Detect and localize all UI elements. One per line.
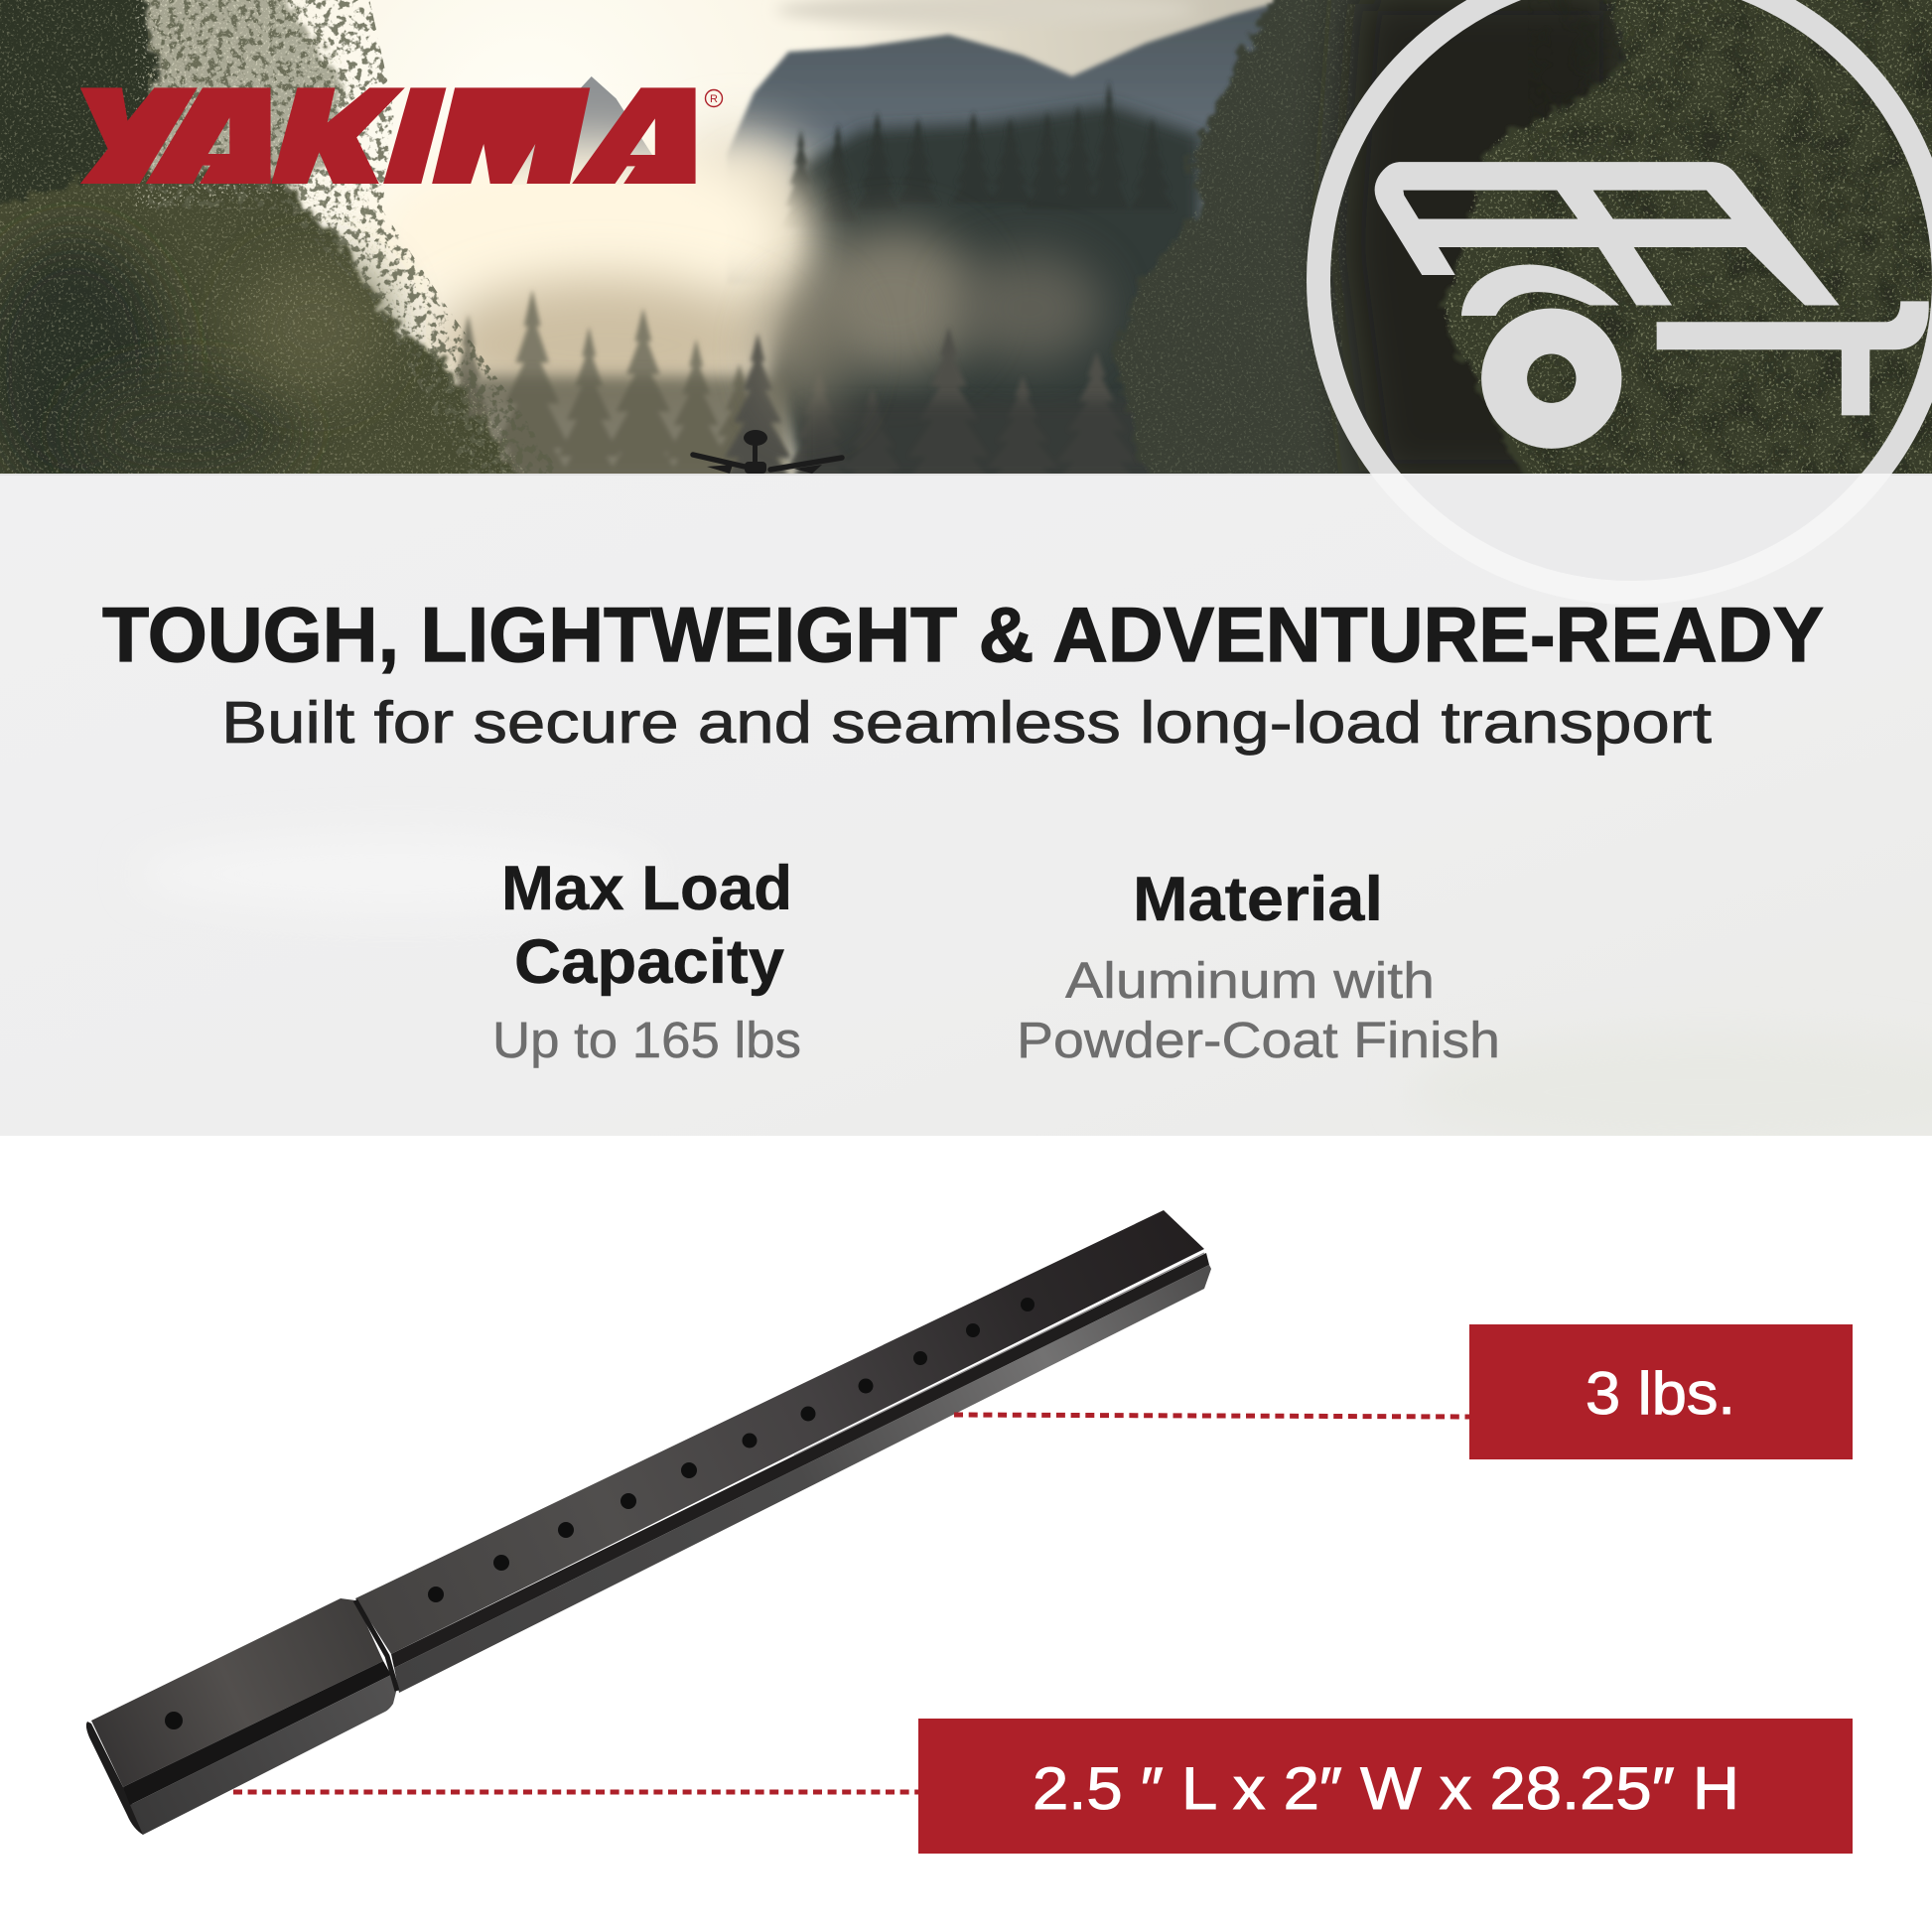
scattered leaves at tree line xyxy=(148,0,561,475)
spec: material: Material xyxy=(1133,865,1383,934)
dotted leader: dimensions xyxy=(233,1789,918,1795)
subtitle: Built for secure and seamless long-load transport xyxy=(221,690,1712,756)
spec: max load capacity: Capacity xyxy=(514,927,784,997)
callout: weight xyxy=(1469,1324,1853,1459)
callout: weight: 3 lbs. xyxy=(1586,1360,1735,1427)
spec: material: Aluminum with xyxy=(1065,952,1435,1009)
tube holes xyxy=(165,1298,1035,1729)
spec: max load capacity xyxy=(492,854,801,1068)
spec: material xyxy=(1017,865,1500,1068)
right forest xyxy=(1118,0,1626,474)
icon: bike handlebar silhouette xyxy=(693,430,842,474)
callout: dimensions xyxy=(918,1719,1853,1854)
upper leafy canopy xyxy=(142,0,345,191)
icon: trailer in a ring xyxy=(1307,0,1932,476)
panel: translucent spec panel xyxy=(0,474,1932,1152)
spec: max load capacity: Up to 165 lbs xyxy=(492,1012,801,1068)
spec: material: Powder-Coat Finish xyxy=(1017,1012,1500,1068)
callout: dimensions: 2.5 ″ L x 2″ W x 28.25″ H xyxy=(1033,1755,1739,1822)
title: TOUGH, LIGHTWEIGHT & ADVENTURE-READY xyxy=(102,591,1824,678)
dotted leader: weight xyxy=(954,1415,1469,1417)
product: hitch extension tube xyxy=(86,1210,1211,1835)
logo: Yakima wordmark: R xyxy=(710,93,718,105)
spec: max load capacity: Max Load xyxy=(501,854,792,923)
hero photo: misty forest xyxy=(0,0,1932,505)
logo: Yakima wordmark xyxy=(80,87,722,184)
